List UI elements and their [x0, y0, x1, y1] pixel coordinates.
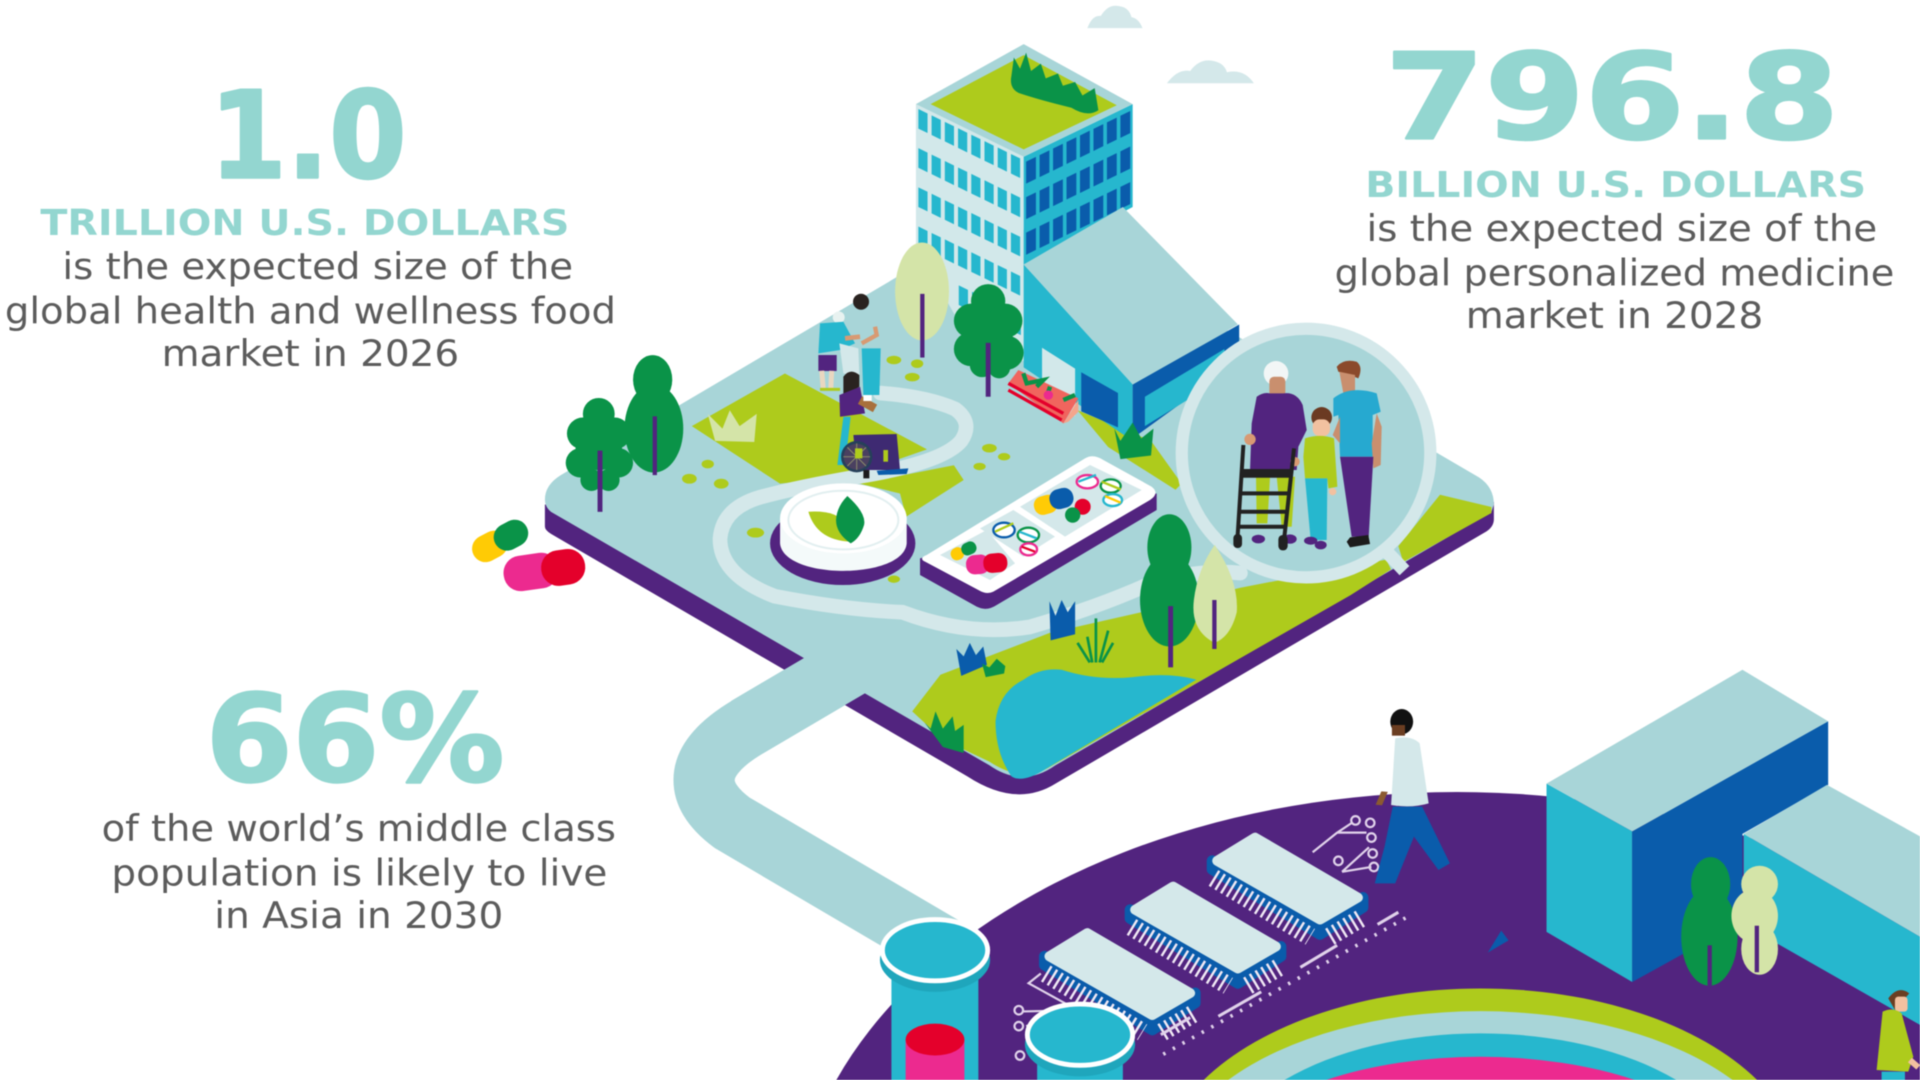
lower pale tree — [1731, 866, 1778, 975]
small blue bush — [956, 643, 987, 676]
purple ground — [836, 792, 1920, 1080]
roof garden — [931, 55, 1117, 149]
road junction — [731, 636, 873, 754]
plate body — [780, 518, 907, 571]
lower technology scene — [836, 670, 1920, 1080]
lens — [1182, 329, 1430, 577]
chip front — [1044, 933, 1195, 1032]
grandmother — [1244, 361, 1307, 544]
vegetable crate — [1008, 370, 1078, 423]
big number 1.0: 1.0 — [209, 68, 407, 207]
man in green coat — [1877, 990, 1918, 1080]
trees on platform — [566, 242, 1024, 512]
wheelchair — [842, 434, 908, 478]
father — [1333, 361, 1382, 547]
test tube cylinder — [880, 920, 990, 1080]
bushes on lawn — [708, 410, 1153, 753]
lawn: bottom right — [912, 560, 1391, 774]
stat: 66 percent — [102, 671, 616, 937]
tower left face — [916, 104, 1024, 361]
green yellow capsule — [467, 515, 533, 567]
compartments — [940, 530, 1015, 580]
lawn: upper left — [692, 373, 927, 484]
chip rear — [1212, 838, 1363, 937]
older patient — [818, 311, 860, 390]
stat: 1.0 trillion — [5, 68, 616, 375]
pink red capsule — [501, 547, 587, 593]
lawn: centre — [860, 465, 964, 517]
capsule yellow green small — [949, 539, 978, 562]
pale door — [1042, 348, 1075, 416]
roof shrub — [1011, 53, 1098, 113]
description: is the expected size of the — [1367, 207, 1877, 250]
microchips — [1044, 838, 1363, 1032]
description: global health and wellness food — [5, 289, 616, 332]
low building — [1024, 207, 1239, 441]
side block building — [1744, 785, 1920, 1025]
description: of the world’s middle class — [102, 807, 616, 850]
winding path — [720, 393, 1240, 630]
plate top — [780, 483, 907, 553]
tower roof — [916, 44, 1133, 157]
rainbow rings — [1204, 988, 1757, 1080]
pale tree — [895, 242, 949, 358]
caregivers and wheelchair — [818, 294, 908, 478]
description: global personalized medicine — [1335, 251, 1894, 294]
tower right windows — [1026, 121, 1131, 244]
capsule yellow blue — [1031, 486, 1076, 517]
health campus platform — [545, 230, 1494, 794]
second cylinder — [1025, 1004, 1135, 1080]
pale crown bush — [708, 410, 757, 442]
office tower — [916, 44, 1133, 361]
description: market in 2028 — [1466, 294, 1763, 337]
bush near building — [1114, 422, 1153, 459]
pill tray — [920, 456, 1157, 609]
road to lower scene — [704, 662, 943, 947]
left jagged tree — [566, 398, 633, 512]
big number 796.8: 796.8 — [1385, 29, 1839, 167]
walking man — [1375, 709, 1450, 883]
lawn: right corner — [1398, 495, 1491, 562]
subheading: TRILLION U.S. DOLLARS — [40, 203, 569, 244]
low building right face — [1133, 324, 1239, 438]
magnifier with family — [1182, 329, 1430, 577]
capsule red green — [1065, 499, 1091, 523]
plate base — [770, 502, 915, 585]
small green bush — [982, 659, 1005, 677]
green leaf — [836, 496, 864, 543]
description: market in 2026 — [162, 332, 459, 375]
subheading: BILLION U.S. DOLLARS — [1365, 165, 1866, 206]
tower left windows — [918, 119, 1024, 327]
chip middle — [1130, 887, 1281, 986]
lawn dots — [682, 356, 1010, 583]
pushing woman — [837, 372, 875, 465]
small blue marker — [1488, 931, 1509, 953]
tray side — [920, 493, 1157, 609]
tower right face — [1024, 104, 1133, 264]
big number 66%: 66% — [206, 671, 504, 810]
lower dark tree — [1681, 857, 1738, 986]
dark door — [1081, 372, 1118, 427]
stat: 796.8 billion — [1335, 29, 1894, 337]
capsule pink red — [965, 552, 1008, 575]
description: in Asia in 2030 — [214, 894, 503, 937]
dark tree near building — [954, 284, 1024, 397]
low building roof — [1024, 207, 1238, 384]
rear block building — [1547, 670, 1828, 982]
family — [1233, 361, 1382, 550]
low building front — [1024, 264, 1133, 441]
lower trees — [1681, 857, 1778, 986]
caregiver — [848, 294, 881, 395]
left blob tree — [624, 355, 683, 475]
front dark tree — [1140, 514, 1199, 667]
medical plate with leaf — [770, 483, 915, 585]
clouds — [1087, 6, 1254, 83]
boy — [1303, 407, 1337, 549]
description: population is likely to live — [111, 851, 607, 894]
right face window — [1145, 349, 1224, 426]
circuit traces — [1014, 816, 1407, 1060]
platform base — [545, 502, 1494, 794]
platform surface — [545, 230, 1494, 777]
handle — [1384, 549, 1404, 571]
floating capsules — [467, 515, 587, 593]
front trees — [1140, 514, 1237, 667]
coloured tablets — [993, 475, 1122, 555]
lime leaf — [808, 512, 850, 542]
green bush lower — [924, 711, 964, 753]
blue bush — [1049, 600, 1075, 640]
lawn: near building — [1078, 410, 1182, 490]
grass tuft — [1078, 618, 1113, 662]
description: is the expected size of the — [62, 245, 573, 288]
front pale tree — [1193, 545, 1237, 649]
tray top — [922, 456, 1155, 593]
pond — [996, 669, 1196, 779]
walker — [1233, 445, 1294, 550]
